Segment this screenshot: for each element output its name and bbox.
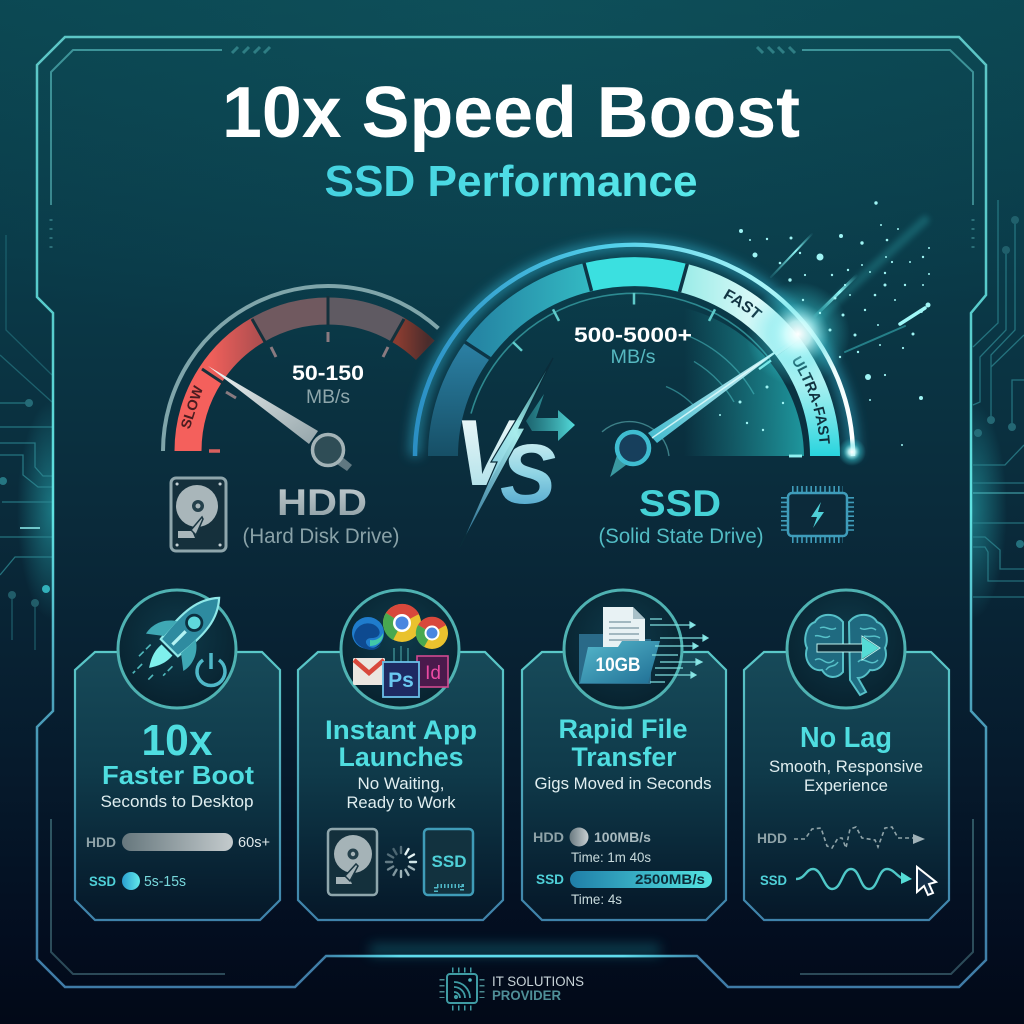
HDD gauge segments bbox=[188, 311, 425, 451]
card description: Gigs Moved in Seconds bbox=[534, 774, 712, 793]
icon: folder with arrows bbox=[564, 590, 708, 708]
HDD speed value: 50-150 bbox=[292, 362, 364, 385]
SSD speed arcs bbox=[602, 335, 754, 456]
SSD smooth line: SSD bbox=[760, 872, 787, 888]
boot time comparison: HDD bbox=[86, 834, 116, 850]
transfer speed comparison: Time: 1m 40s bbox=[571, 849, 651, 865]
card heading: Faster Boot bbox=[102, 760, 254, 790]
SSD label: (Solid State Drive) bbox=[598, 525, 764, 548]
card description: Experience bbox=[804, 776, 888, 795]
HDD label: HDD bbox=[277, 482, 367, 523]
icon: folder with arrows: 10GB bbox=[596, 655, 640, 676]
card heading bbox=[558, 714, 688, 772]
HDD speed unit: MB/s bbox=[306, 386, 350, 408]
dots bbox=[719, 201, 930, 446]
card description: Smooth, Responsive bbox=[769, 757, 923, 776]
title: 10x Speed Boost bbox=[222, 73, 800, 153]
logo bbox=[442, 970, 584, 1008]
transfer speed comparison bbox=[533, 828, 712, 907]
SSD speed value: 500-5000+ bbox=[574, 324, 692, 347]
card heading: Launches bbox=[338, 742, 464, 772]
brand descriptor: PROVIDER bbox=[492, 988, 561, 1003]
card description bbox=[346, 774, 456, 812]
panel: faster boot bbox=[75, 579, 280, 920]
HDD label: (Hard Disk Drive) bbox=[242, 525, 400, 548]
SSD needle bbox=[610, 337, 797, 477]
SSD gauge inner wedge bbox=[634, 304, 804, 456]
panel: no lag bbox=[744, 590, 949, 920]
icon: app logos: Id bbox=[425, 663, 441, 684]
VS emblem bbox=[454, 358, 575, 547]
icon: chip with bolt bbox=[784, 489, 851, 540]
frame top highlight bbox=[724, 36, 880, 38]
transfer speed comparison: Time: 4s bbox=[571, 891, 622, 907]
card heading: Transfer bbox=[572, 742, 677, 772]
VS lightning bolt bbox=[460, 358, 553, 547]
starburst at needle tip bbox=[746, 282, 850, 386]
card heading: 10x bbox=[142, 716, 213, 765]
HDD gauge ticks bbox=[209, 449, 220, 453]
icon: small hard disk bbox=[328, 829, 377, 895]
HDD gauge bbox=[163, 286, 438, 471]
icon: loading spinner bbox=[386, 847, 416, 877]
card heading bbox=[102, 716, 254, 790]
card description bbox=[769, 757, 923, 795]
card description: Ready to Work bbox=[346, 793, 456, 812]
SLOW label: SLOW bbox=[177, 383, 206, 431]
icon: small SSD: SSD bbox=[432, 852, 466, 871]
SSD smooth line bbox=[760, 869, 912, 889]
transfer speed comparison: SSD bbox=[536, 871, 564, 887]
transfer speed comparison: 2500MB/s bbox=[635, 871, 705, 887]
icon: rocket and power bbox=[118, 579, 238, 708]
icon: cursor bbox=[917, 867, 936, 895]
subtitle: SSD Performance bbox=[324, 157, 698, 206]
HDD gauge outer ring bbox=[163, 286, 438, 451]
speed streaks bbox=[771, 220, 925, 352]
SSD speed unit: MB/s bbox=[610, 346, 656, 368]
boot time comparison: 60s+ bbox=[238, 835, 270, 851]
left circuit traces bbox=[0, 235, 52, 650]
transfer speed comparison: 100MB/s bbox=[594, 829, 651, 845]
HDD latency line: HDD bbox=[757, 830, 787, 846]
icon: hard disk bbox=[171, 478, 226, 551]
SSD gauge segments bbox=[443, 272, 825, 456]
FAST label: FAST bbox=[723, 288, 763, 318]
SSD label bbox=[598, 483, 764, 548]
ULTRA-FAST label: ULTRA-FAST bbox=[793, 356, 830, 444]
VS arrow bbox=[526, 394, 575, 441]
boot time comparison: SSD bbox=[89, 873, 116, 889]
boot time comparison bbox=[86, 833, 270, 890]
HDD needle bbox=[208, 366, 352, 471]
SSD gauge bbox=[403, 233, 865, 477]
icon: chip with signal bbox=[442, 970, 482, 1008]
card description: No Waiting, bbox=[358, 774, 444, 793]
spark particles bbox=[719, 201, 930, 466]
card heading: Rapid File bbox=[558, 714, 688, 744]
HDD latency line bbox=[757, 827, 925, 848]
icon: brain with arrow bbox=[787, 590, 905, 708]
SSD gauge ring bbox=[415, 245, 853, 456]
card heading: No Lag bbox=[800, 722, 892, 754]
transfer speed comparison: HDD bbox=[533, 829, 564, 845]
ring end glow bbox=[838, 438, 866, 466]
icon: app logos: Ps bbox=[388, 669, 414, 692]
brand name: IT SOLUTIONS bbox=[492, 974, 584, 989]
SSD inner scale bbox=[471, 293, 802, 456]
SSD gauge glow bbox=[415, 245, 853, 456]
SSD label: SSD bbox=[639, 483, 721, 524]
footer glow line bbox=[326, 944, 697, 957]
right circuit traces bbox=[973, 200, 1024, 597]
icon: app logos bbox=[341, 590, 459, 708]
V letter: V bbox=[454, 400, 524, 505]
HDD label bbox=[242, 482, 400, 548]
card description: Seconds to Desktop bbox=[100, 792, 254, 811]
HDD gauge tick marks bbox=[226, 332, 388, 398]
panel: rapid file transfer bbox=[522, 590, 726, 920]
boot time comparison: 5s-15s bbox=[144, 874, 186, 890]
card heading bbox=[325, 715, 477, 772]
panel: instant app launches bbox=[298, 590, 503, 920]
S letter: S bbox=[500, 427, 556, 521]
card heading: Instant App bbox=[325, 715, 477, 745]
icon: small SSD bbox=[424, 829, 473, 895]
